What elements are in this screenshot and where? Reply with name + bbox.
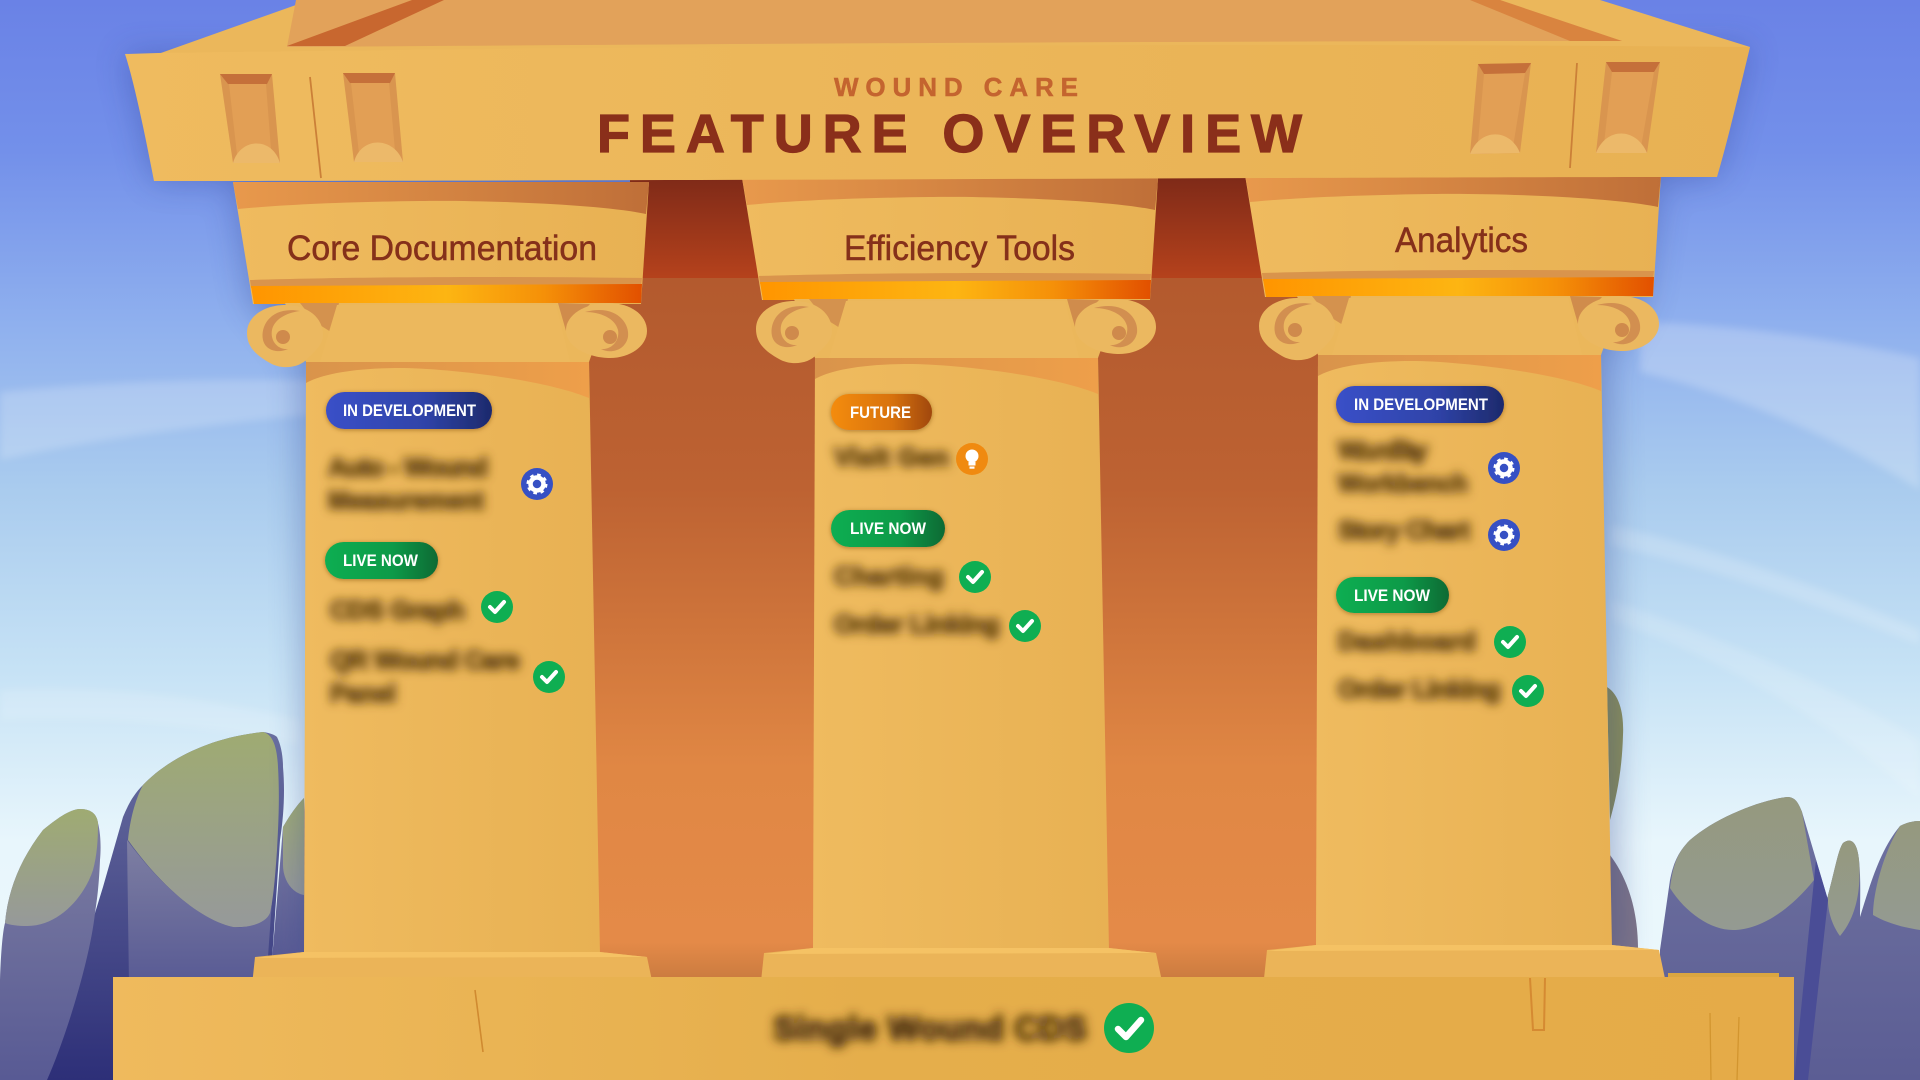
column 2	[742, 178, 1164, 991]
blurred feature name	[328, 452, 488, 515]
blurred feature name: Wound Bay	[1338, 435, 1429, 465]
clouds	[0, 322, 1920, 800]
icon: check	[1494, 626, 1526, 658]
title	[597, 72, 1302, 164]
subtitle: WOUND CARE	[834, 72, 1078, 102]
blurred feature name: Single Wound CDS	[773, 1010, 1087, 1048]
blurred feature name: Dashboard	[1338, 626, 1476, 656]
blurred feature name: CDS Graph	[330, 595, 465, 625]
blurred feature name: Panel	[330, 678, 396, 708]
entablature	[125, 45, 1750, 181]
roof pediment	[158, 0, 1750, 60]
icon: check	[533, 661, 565, 693]
icon: check	[481, 591, 513, 623]
badge: in development	[326, 392, 492, 429]
blurred feature name: Auto - Wound	[328, 452, 488, 482]
heading: Core Documentation: Core Documentation	[287, 229, 597, 268]
badge: live now: LIVE NOW	[850, 519, 927, 538]
icon: gear	[1488, 519, 1520, 551]
blurred feature name	[1338, 435, 1468, 498]
badge: in development: IN DEVELOPMENT	[1354, 395, 1489, 414]
icon: bulb	[956, 443, 988, 475]
icon: large check	[1104, 1003, 1154, 1053]
heading: Analytics: Analytics	[1395, 221, 1528, 260]
panel: efficiency tools items	[831, 394, 1041, 642]
plinth	[113, 973, 1794, 1080]
rocks left	[0, 732, 310, 1080]
panel: core documentation items	[325, 392, 565, 708]
badge: live now: LIVE NOW	[343, 551, 419, 570]
plinth feature	[773, 1003, 1154, 1053]
blurred feature name: Visit Gen	[834, 442, 949, 472]
badge: live now	[831, 510, 945, 547]
badge: in development: IN DEVELOPMENT	[343, 401, 477, 420]
badge: future: FUTURE	[850, 403, 911, 422]
metope left 2	[343, 73, 403, 162]
column 3	[1245, 175, 1667, 988]
badge: live now	[1336, 577, 1449, 613]
main heading: FEATURE OVERVIEW	[597, 104, 1302, 164]
blurred feature name: Workbench	[1338, 468, 1468, 498]
icon: check	[1512, 675, 1544, 707]
blurred feature name: Charting	[834, 561, 944, 591]
blurred feature name: QR Wound Care	[330, 645, 520, 675]
column 1	[233, 182, 655, 995]
blurred feature name: Story Chart	[1338, 515, 1470, 545]
metope left 1	[220, 74, 280, 163]
badge: future	[831, 394, 932, 430]
icon: gear	[521, 468, 553, 500]
metope right 2	[1596, 62, 1660, 153]
rocks right	[1607, 687, 1920, 1080]
icon: check	[1009, 610, 1041, 642]
back wall between columns	[570, 170, 1350, 980]
badge: live now: LIVE NOW	[1354, 586, 1431, 605]
blurred feature name: Order Linking	[834, 609, 1000, 639]
blurred feature name: Order Linking	[1338, 674, 1501, 704]
heading: Efficiency Tools: Efficiency Tools	[844, 229, 1075, 268]
icon: gear	[1488, 452, 1520, 484]
panel: analytics items	[1336, 386, 1544, 707]
blurred feature name: Measurement	[328, 485, 484, 515]
temple shadow on sky	[125, 47, 1750, 960]
blurred feature name	[330, 645, 520, 708]
metope right 1	[1470, 63, 1531, 154]
badge: live now	[325, 542, 438, 579]
icon: check	[959, 561, 991, 593]
badge: in development	[1336, 386, 1504, 423]
